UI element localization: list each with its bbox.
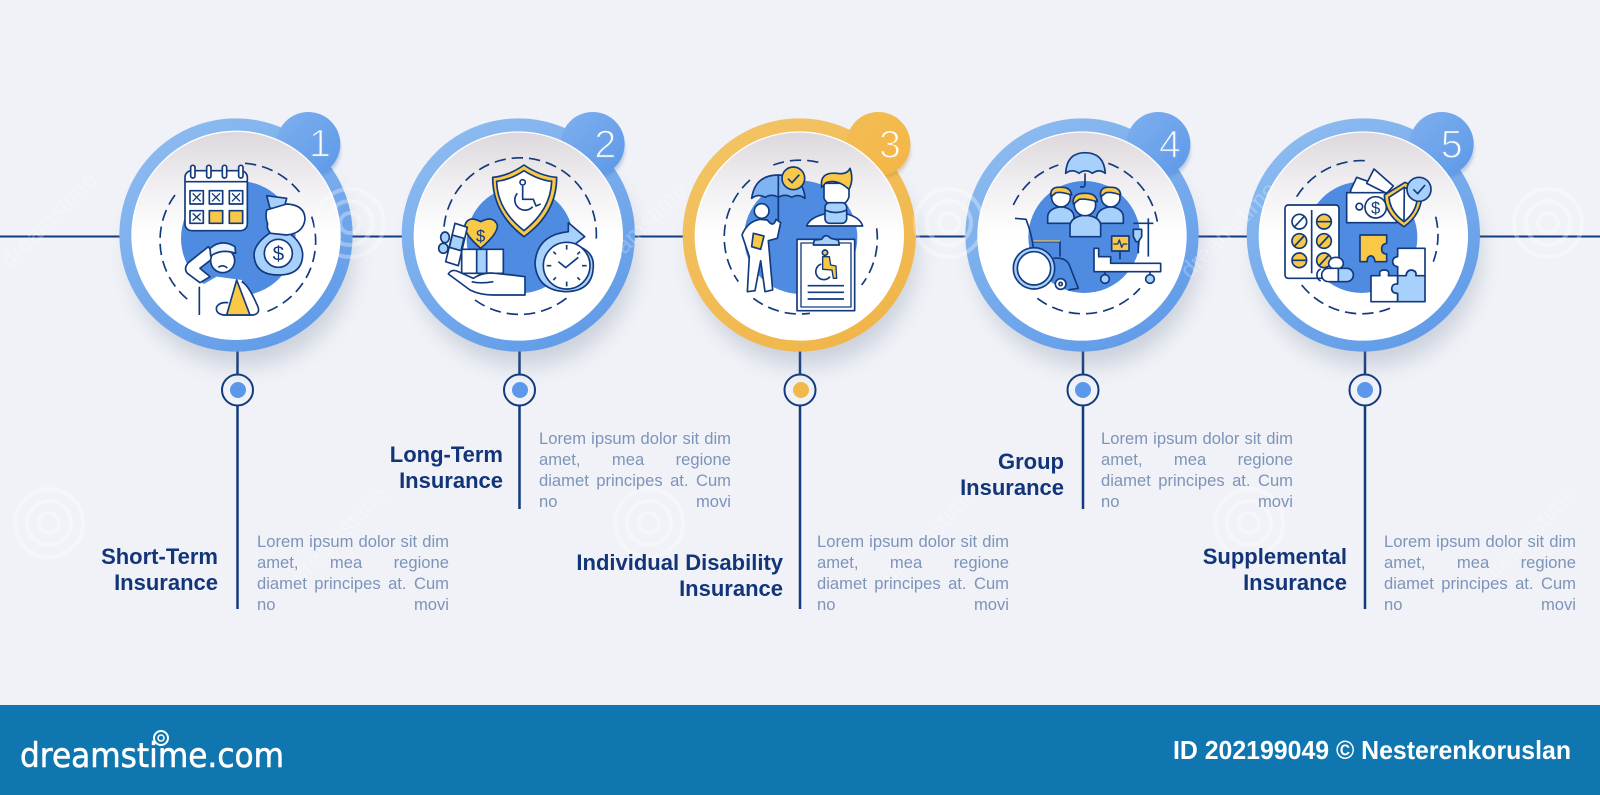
watermark spirals bbox=[15, 189, 1582, 557]
text block 1: amet, mea regione bbox=[257, 553, 449, 572]
heading: long-term insurance bbox=[390, 442, 503, 492]
text block 2 bbox=[539, 429, 731, 511]
watermark text: dreamstime bbox=[875, 481, 983, 589]
icon: yellow puzzle piece bbox=[1360, 235, 1387, 262]
text block 5: Lorem ipsum dolor sit dim bbox=[1384, 532, 1576, 551]
heading: group insurance bbox=[960, 449, 1064, 500]
text block 3: no movi bbox=[817, 595, 1009, 614]
text block 2: Lorem ipsum dolor sit dim bbox=[539, 429, 731, 448]
icon: gift and heart on hand bbox=[439, 219, 525, 295]
node 1 bbox=[222, 374, 253, 406]
watermark text: dreamstime bbox=[585, 176, 693, 284]
icon: three people bbox=[1048, 187, 1123, 237]
icon: injured man with sling bbox=[186, 243, 259, 315]
text block 5: no movi bbox=[1384, 595, 1576, 614]
text block 1: Lorem ipsum dolor sit dim bbox=[257, 532, 449, 551]
panel: circle 5 supplemental bbox=[1247, 112, 1481, 367]
text block 4: no movi bbox=[1101, 492, 1293, 511]
heading: individual disability insurance bbox=[576, 550, 783, 600]
panel: circle 1 short-term bbox=[119, 112, 353, 367]
panel: circle 4 group: 4 bbox=[1159, 122, 1181, 166]
heading: short-term insurance: Insurance bbox=[114, 570, 218, 594]
vertical connector 2 bbox=[518, 350, 521, 509]
heading: supplemental insurance: Supplemental bbox=[1203, 544, 1347, 569]
text block 4 bbox=[1101, 429, 1293, 511]
vertical connector 5 bbox=[1364, 350, 1366, 609]
panel: circle 4 group bbox=[965, 112, 1199, 367]
icon: clock with arrow bbox=[535, 223, 593, 292]
icon: clipboard with disabled person bbox=[797, 236, 855, 311]
text block 4: amet, mea regione bbox=[1101, 450, 1293, 469]
icon: assembled puzzle bbox=[1371, 248, 1425, 302]
heading: short-term insurance bbox=[101, 544, 218, 594]
text block 2: diamet principes at. Cum bbox=[539, 471, 731, 490]
icon: man with neck brace bbox=[807, 168, 863, 226]
heading: supplemental insurance: Insurance bbox=[1243, 570, 1347, 594]
panel: circle 3 individual disability (highlighted) bbox=[683, 112, 917, 367]
panel: circle 1 short-term: 1 bbox=[309, 122, 331, 166]
panel: circle 2 long-term: 2 bbox=[594, 122, 616, 166]
heading: long-term insurance: Insurance bbox=[399, 468, 503, 492]
icon: umbrella bbox=[1066, 153, 1105, 187]
icon: money bag and hand bbox=[254, 196, 305, 275]
footer bar bbox=[0, 705, 1600, 795]
heading: group insurance: Group bbox=[998, 449, 1064, 474]
icon: shield with wheelchair bbox=[493, 165, 557, 237]
text block 1: diamet principes at. Cum bbox=[257, 574, 449, 593]
panel: circle 5 supplemental: 5 bbox=[1441, 122, 1463, 166]
heading: group insurance: Insurance bbox=[960, 474, 1064, 500]
text block 3: Lorem ipsum dolor sit dim bbox=[817, 532, 1009, 551]
text block 3: amet, mea regione bbox=[817, 553, 1009, 572]
heading: short-term insurance: Short-Term bbox=[101, 544, 218, 569]
panel: circle 3 individual disability (highlighted): 3 bbox=[879, 122, 901, 166]
panel: circle 2 long-term bbox=[402, 112, 636, 367]
watermark text: dreamstime bbox=[1175, 176, 1283, 284]
text block 2: amet, mea regione bbox=[539, 450, 731, 469]
icon: gift and heart on hand: $ bbox=[476, 226, 485, 245]
icon: calendar bbox=[185, 165, 247, 231]
text block 5: diamet principes at. Cum bbox=[1384, 574, 1576, 593]
horizontal timeline line bbox=[0, 236, 1600, 238]
vertical connector 4 bbox=[1082, 350, 1084, 509]
footer logo: dreamstime.com bbox=[20, 736, 284, 776]
heading: individual disability insurance: Individual Disability bbox=[576, 550, 783, 575]
watermark text: dreamstime bbox=[285, 481, 393, 589]
text block 1 bbox=[257, 532, 449, 614]
icon: hospital bed with monitor and drip bbox=[1094, 218, 1161, 283]
watermark text bbox=[0, 166, 1583, 589]
heading: long-term insurance: Long-Term bbox=[390, 442, 503, 467]
text block 5: amet, mea regione bbox=[1384, 553, 1576, 572]
text block 2: no movi bbox=[539, 492, 731, 511]
text block 5 bbox=[1384, 532, 1576, 614]
icon: banknotes and shield: $ bbox=[1371, 198, 1380, 217]
node 3 bbox=[784, 374, 816, 406]
node 4 bbox=[1068, 374, 1098, 406]
text block 3 bbox=[817, 532, 1009, 614]
vertical connector 1 bbox=[236, 350, 239, 609]
icon: money bag and hand: $ bbox=[273, 243, 285, 266]
text block 4: Lorem ipsum dolor sit dim bbox=[1101, 429, 1293, 448]
icon: person with umbrella bbox=[742, 167, 805, 292]
text block 3: diamet principes at. Cum bbox=[817, 574, 1009, 593]
icon: blister pack and pills bbox=[1285, 205, 1353, 282]
icon: wheelchair bbox=[1013, 218, 1078, 290]
node 2 bbox=[504, 374, 535, 406]
text block 4: diamet principes at. Cum bbox=[1101, 471, 1293, 490]
icon: banknotes and shield bbox=[1347, 169, 1431, 227]
text block 1: no movi bbox=[257, 595, 449, 614]
heading: individual disability insurance: Insurance bbox=[679, 576, 783, 600]
footer image id and credit: ID 202199049 © Nesterenkoruslan bbox=[1173, 735, 1571, 765]
heading: supplemental insurance bbox=[1203, 544, 1347, 594]
node 5 bbox=[1350, 374, 1380, 406]
watermark text: dreamstime bbox=[1475, 481, 1583, 589]
vertical connector 3 bbox=[799, 350, 801, 609]
